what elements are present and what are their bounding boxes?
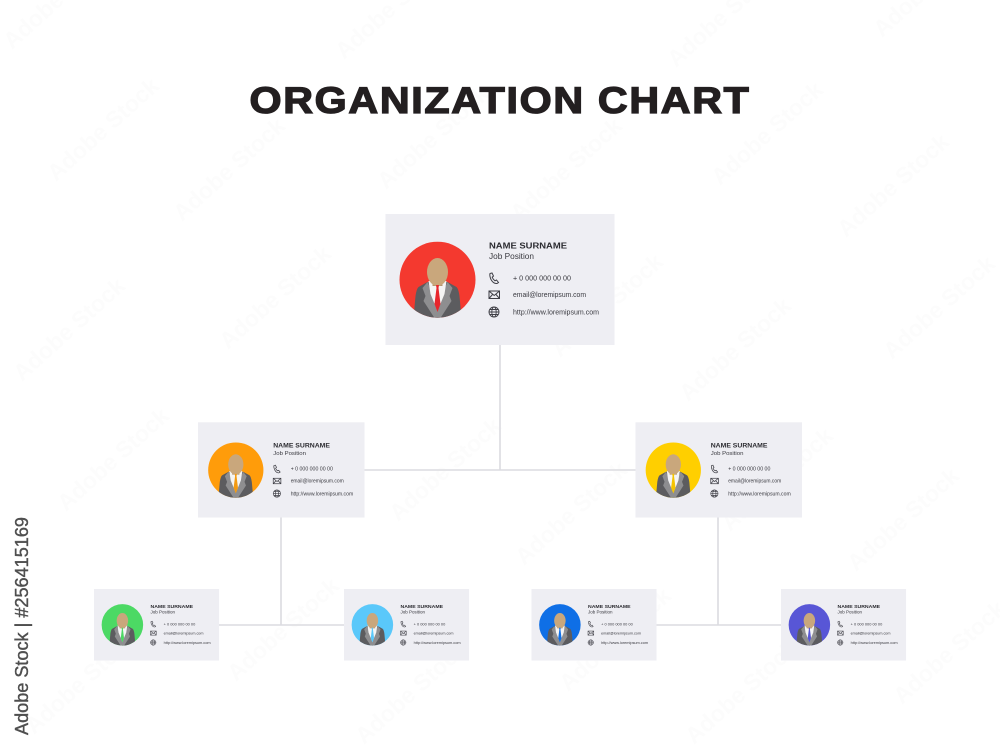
contact details: http://www.loremipsum.com	[851, 640, 898, 645]
avatar: green	[102, 604, 143, 646]
card: staff blue	[532, 589, 657, 661]
contact details	[401, 621, 461, 645]
watermark pattern: Adobe Stock	[350, 635, 472, 749]
card: staff light blue	[344, 589, 469, 661]
watermark pattern: Adobe Stock	[554, 582, 676, 696]
name and position	[273, 442, 330, 457]
name and position: Job Position	[588, 610, 613, 615]
watermark pattern: Adobe Stock	[505, 112, 627, 226]
contact details: + 0 000 000 00 00	[414, 621, 446, 626]
watermark pattern: Adobe Stock	[706, 76, 828, 190]
watermark pattern: Adobe Stock	[214, 240, 336, 354]
contact details	[588, 621, 649, 645]
watermark pattern: Adobe Stock	[8, 272, 130, 386]
contact details: email@loremipsum.com	[851, 630, 891, 635]
contact details: http://www.loremipsum.com	[513, 308, 599, 316]
watermark pattern: Adobe Stock	[222, 572, 344, 686]
name and position: NAME SURNAME	[401, 604, 443, 610]
watermark pattern: Adobe Stock	[372, 80, 494, 194]
name and position: NAME SURNAME	[151, 604, 193, 610]
avatar: yellow	[646, 442, 701, 498]
contact details: email@loremipsum.com	[513, 290, 586, 299]
watermark pattern: Adobe Stock	[878, 250, 1000, 364]
contact details: http://www.loremipsum.com	[164, 640, 211, 645]
contact details: http://www.loremipsum.com	[414, 640, 461, 645]
name and position: Job Position	[273, 451, 306, 457]
contact details: email@loremipsum.com	[728, 479, 781, 485]
contact details: email@loremipsum.com	[414, 630, 454, 635]
watermark pattern: Adobe Stock	[842, 462, 964, 576]
connector lines	[219, 345, 781, 625]
contact details	[838, 621, 898, 645]
watermark pattern: Adobe Stock	[832, 128, 954, 242]
contact details	[151, 621, 211, 645]
name and position: NAME SURNAME	[588, 604, 631, 610]
name and position	[151, 604, 193, 615]
name and position: NAME SURNAME	[273, 442, 330, 449]
avatar: purple	[789, 604, 830, 646]
name and position: NAME SURNAME	[838, 604, 880, 610]
watermark pattern: Adobe Stock	[20, 625, 142, 739]
watermark pattern: Adobe Stock	[52, 402, 174, 516]
contact details	[489, 273, 599, 317]
watermark pattern: Adobe Stock	[546, 248, 668, 362]
name and position	[838, 604, 880, 615]
watermark pattern: Adobe Stock	[384, 412, 506, 526]
contact details: email@loremipsum.com	[601, 630, 642, 635]
title: ORGANIZATION CHART	[250, 80, 750, 121]
watermark pattern: Adobe Stock	[680, 635, 802, 749]
avatar: orange	[208, 442, 263, 498]
avatar: light blue	[352, 604, 393, 646]
name and position: Job Position	[151, 610, 176, 615]
contact details: http://www.loremipsum.com	[728, 491, 791, 497]
name and position: Job Position	[838, 610, 863, 615]
card: left manager	[198, 422, 364, 518]
contact details	[711, 465, 791, 497]
contact details: http://www.loremipsum.com	[601, 640, 649, 645]
name and position	[711, 442, 767, 457]
contact details: + 0 000 000 00 00	[513, 274, 571, 282]
contact details: + 0 000 000 00 00	[851, 621, 883, 626]
watermark pattern: Adobe Stock	[510, 456, 632, 570]
name and position: Job Position	[489, 252, 534, 261]
card: staff purple	[781, 589, 906, 661]
card: top executive	[386, 214, 614, 345]
watermark pattern: Adobe Stock	[42, 72, 164, 186]
contact details: + 0 000 000 00 00	[291, 467, 333, 473]
avatar: red	[400, 242, 476, 318]
watermark pattern: Adobe Stock	[674, 292, 796, 406]
card: right manager	[636, 422, 802, 518]
contact details: email@loremipsum.com	[164, 630, 204, 635]
card: staff green	[94, 589, 219, 661]
avatar: blue	[539, 604, 581, 646]
name and position	[401, 604, 443, 615]
name and position: NAME SURNAME	[711, 442, 767, 449]
name and position	[588, 604, 631, 615]
watermark pattern: Adobe Stock	[716, 422, 838, 536]
name and position: Job Position	[401, 610, 426, 615]
organization chart	[14, 86, 906, 736]
watermark pattern: Adobe Stock	[168, 112, 290, 226]
contact details: http://www.loremipsum.com	[291, 491, 353, 497]
contact details	[273, 465, 353, 497]
vertical stock credit: Adobe Stock | #256415169	[12, 517, 32, 735]
contact details: + 0 000 000 00 00	[728, 467, 770, 473]
name and position: NAME SURNAME	[489, 240, 567, 250]
contact details: + 0 000 000 00 00	[164, 621, 196, 626]
name and position: Job Position	[711, 451, 743, 457]
contact details: + 0 000 000 00 00	[601, 621, 634, 626]
name and position	[489, 240, 567, 261]
contact details: email@loremipsum.com	[291, 479, 344, 485]
